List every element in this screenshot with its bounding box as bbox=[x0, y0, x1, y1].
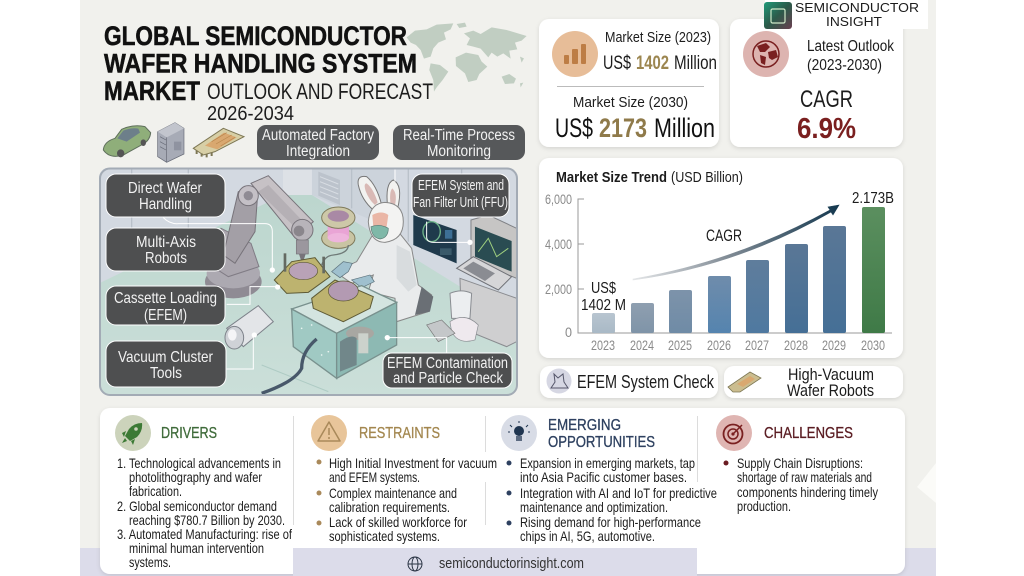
drivers list: photolithography and wafer bbox=[129, 469, 262, 485]
wall display bbox=[413, 215, 457, 263]
restraints list: Complex maintenance and bbox=[329, 485, 457, 501]
title: 2026-2034 bbox=[207, 103, 294, 125]
column: emerging opportunities: OPPORTUNITIES bbox=[548, 434, 655, 451]
chart title: (USD Billion) bbox=[671, 169, 743, 186]
restraints list bbox=[316, 455, 497, 544]
label: multi-axis robots: Multi-Axis bbox=[136, 234, 196, 251]
axes: 2,000 bbox=[545, 282, 572, 297]
pill: automated factory integration: Integration bbox=[286, 143, 350, 160]
icon: technician bbox=[546, 368, 572, 394]
drivers list: minimal human intervention bbox=[129, 540, 264, 556]
year labels bbox=[591, 338, 885, 353]
chart annotations: 1402 M bbox=[581, 297, 626, 314]
computer workstation bbox=[457, 215, 517, 347]
icon: globe bbox=[743, 31, 789, 77]
axes: 0 bbox=[565, 325, 572, 340]
column: drivers: DRIVERS bbox=[161, 425, 217, 442]
chart annotations bbox=[581, 190, 894, 314]
particle check device bbox=[427, 291, 478, 342]
arrow: CAGR growth bbox=[633, 205, 839, 280]
pill: automated factory integration bbox=[257, 125, 379, 160]
leader lines bbox=[163, 168, 470, 369]
axes: 6,000 bbox=[545, 192, 572, 207]
world map bbox=[407, 23, 527, 92]
footer website: semiconductorinsight.com bbox=[439, 556, 584, 572]
icon: chip bbox=[728, 372, 761, 392]
icon: car bbox=[103, 126, 151, 157]
panel: factory scene bbox=[99, 168, 517, 395]
drivers list: 1. Technological advancements in bbox=[117, 455, 281, 471]
icon: web globe bbox=[408, 557, 422, 571]
latest outlook: Latest Outlook bbox=[807, 38, 894, 55]
opportunities list bbox=[506, 455, 717, 544]
year labels: 2030 bbox=[861, 338, 885, 353]
label: direct wafer handling bbox=[106, 174, 225, 217]
restraints list: calibration requirements. bbox=[329, 499, 450, 515]
robot arm bbox=[205, 176, 313, 298]
panel: CAGR outlook bbox=[730, 19, 903, 147]
drivers list: reaching $780.7 Billion by 2030. bbox=[129, 512, 285, 528]
pill: EFEM system check bbox=[540, 366, 718, 398]
pill: EFEM system check: EFEM System Check bbox=[577, 372, 715, 392]
pill: automated factory integration: Automated Factory bbox=[262, 127, 374, 144]
pill: real-time process monitoring: Monitoring bbox=[427, 143, 491, 160]
drivers list: fabrication. bbox=[129, 483, 182, 499]
pink vacuum ring bbox=[322, 207, 355, 265]
market size 2023: Million bbox=[674, 53, 717, 74]
restraints list: sophisticated systems. bbox=[329, 528, 440, 544]
label: vacuum cluster tools: Vacuum Cluster bbox=[118, 349, 214, 366]
pill: high-vacuum wafer robots: Wafer Robots bbox=[787, 382, 874, 400]
market size 2030 bbox=[555, 94, 715, 143]
icon: rocket bbox=[115, 415, 151, 451]
label: vacuum cluster tools bbox=[106, 341, 226, 387]
pill: real-time process monitoring: Real-Time Process bbox=[403, 127, 515, 144]
label: cassette loading: (EFEM) bbox=[144, 307, 187, 324]
label: EFEM contamination check bbox=[383, 353, 512, 388]
panel: bottom analysis card bbox=[100, 408, 905, 576]
wafer holder on robot bbox=[274, 253, 330, 293]
challenges list: Supply Chain Disruptions: bbox=[737, 455, 863, 471]
panel: market size trend chart bbox=[539, 158, 903, 358]
wafer holder on chamber bbox=[312, 280, 373, 322]
opportunities list: maintenance and optimization. bbox=[520, 499, 668, 515]
opportunities list: Expansion in emerging markets, tap bbox=[520, 455, 695, 471]
logo bbox=[764, 0, 928, 29]
market size 2023: US$ bbox=[603, 53, 631, 74]
label: EFEM system and FFU: EFEM System and bbox=[418, 177, 504, 194]
icon: bar chart bbox=[552, 31, 598, 77]
label: direct wafer handling: Direct Wafer bbox=[128, 180, 203, 197]
year labels: 2023 bbox=[591, 338, 615, 353]
label: multi-axis robots: Robots bbox=[145, 250, 187, 267]
label: direct wafer handling: Handling bbox=[139, 196, 192, 213]
market size 2030: 2173 bbox=[599, 113, 647, 143]
column: emerging opportunities: EMERGING bbox=[548, 417, 621, 434]
column: drivers bbox=[115, 415, 292, 570]
axes bbox=[545, 192, 892, 340]
year labels: 2024 bbox=[630, 338, 654, 353]
vacuum cylinder bbox=[225, 306, 273, 349]
challenges list: shortage of raw materials and bbox=[737, 469, 872, 485]
column: emerging opportunities bbox=[501, 415, 717, 544]
icon: warning bbox=[311, 415, 347, 451]
drivers list: 3. Automated Manufacturing: rise of bbox=[117, 526, 292, 542]
year labels: 2028 bbox=[784, 338, 808, 353]
latest outlook bbox=[807, 38, 894, 74]
technician in bunny suit bbox=[332, 176, 433, 322]
year labels: 2027 bbox=[745, 338, 769, 353]
year labels: 2025 bbox=[668, 338, 692, 353]
chart annotations: 2.173B bbox=[852, 190, 894, 207]
restraints list: High Initial Investment for vacuum bbox=[329, 455, 497, 471]
challenges list: production. bbox=[737, 498, 791, 514]
opportunities list: Integration with AI and IoT for predictive bbox=[520, 485, 717, 501]
logo: INSIGHT bbox=[826, 14, 882, 29]
title: GLOBAL SEMICONDUCTOR bbox=[104, 21, 407, 51]
column: challenges: CHALLENGES bbox=[764, 425, 853, 442]
title: WAFER HANDLING SYSTEM bbox=[104, 48, 417, 78]
market size 2030: Market Size (2030) bbox=[573, 94, 688, 111]
restraints list: Lack of skilled workforce for bbox=[329, 514, 467, 530]
opportunities list: Rising demand for high-performance bbox=[520, 514, 701, 530]
opportunities list: chips in AI, 5G, automotive. bbox=[520, 528, 655, 544]
latest outlook: (2023-2030) bbox=[807, 57, 882, 74]
restraints list: and EFEM systems. bbox=[329, 469, 420, 485]
bars bbox=[592, 207, 885, 333]
icon: light bulb bbox=[501, 415, 537, 451]
market size 2023: 1402 bbox=[636, 53, 669, 74]
CAGR value bbox=[797, 86, 856, 145]
challenges list bbox=[724, 455, 878, 514]
challenges list: components hindering timely bbox=[737, 484, 878, 500]
panel: market size bbox=[539, 19, 719, 147]
icon: server cabinet bbox=[158, 123, 184, 162]
label: EFEM contamination check: EFEM Contamination bbox=[387, 355, 508, 372]
label: cassette loading: Cassette Loading bbox=[114, 290, 217, 307]
scene illustration bbox=[99, 168, 517, 395]
chart annotations: CAGR bbox=[706, 226, 742, 245]
vacuum cable bbox=[262, 339, 317, 393]
pill: high-vacuum wafer robots bbox=[724, 366, 903, 400]
glass inspection chamber bbox=[292, 286, 397, 378]
axes: 4,000 bbox=[545, 237, 572, 252]
column: restraints bbox=[311, 415, 497, 544]
logo: SEMICONDUCTOR bbox=[795, 0, 919, 15]
chart title bbox=[556, 169, 743, 186]
drivers list bbox=[117, 455, 292, 570]
market size 2030: US$ bbox=[555, 113, 593, 143]
footer band bbox=[80, 548, 936, 576]
year labels: 2029 bbox=[822, 338, 846, 353]
opportunities list: into Asia Pacific customer bases. bbox=[520, 469, 687, 485]
icon: target bbox=[716, 415, 752, 451]
chart title: Market Size Trend bbox=[556, 169, 667, 186]
chart annotations: US$ bbox=[591, 280, 616, 297]
title bbox=[104, 21, 433, 125]
column: restraints: RESTRAINTS bbox=[359, 425, 440, 442]
year labels: 2026 bbox=[707, 338, 731, 353]
title: OUTLOOK AND FORECAST bbox=[207, 79, 433, 104]
CAGR value: 6.9% bbox=[797, 113, 856, 145]
drivers list: systems. bbox=[129, 554, 171, 570]
label: multi-axis robots bbox=[106, 228, 225, 271]
label: EFEM system and FFU bbox=[412, 174, 509, 217]
label: EFEM system and FFU: Fan Filter Unit (FFU) bbox=[413, 194, 508, 211]
CAGR value: CAGR bbox=[800, 86, 853, 113]
column: challenges bbox=[716, 415, 878, 514]
pill: real-time process monitoring bbox=[393, 125, 525, 160]
label: vacuum cluster tools: Tools bbox=[150, 365, 182, 382]
pill: high-vacuum wafer robots: High-Vacuum bbox=[788, 366, 874, 384]
label: cassette loading bbox=[106, 286, 225, 325]
market size 2023: Market Size (2023) bbox=[605, 30, 711, 46]
market size 2023 bbox=[603, 30, 717, 74]
market size 2030: Million bbox=[654, 113, 715, 143]
title: MARKET bbox=[104, 76, 200, 106]
drivers list: 2. Global semiconductor demand bbox=[117, 498, 277, 514]
icon: chip module bbox=[193, 128, 244, 157]
label: EFEM contamination check: and Particle Check bbox=[393, 370, 503, 387]
